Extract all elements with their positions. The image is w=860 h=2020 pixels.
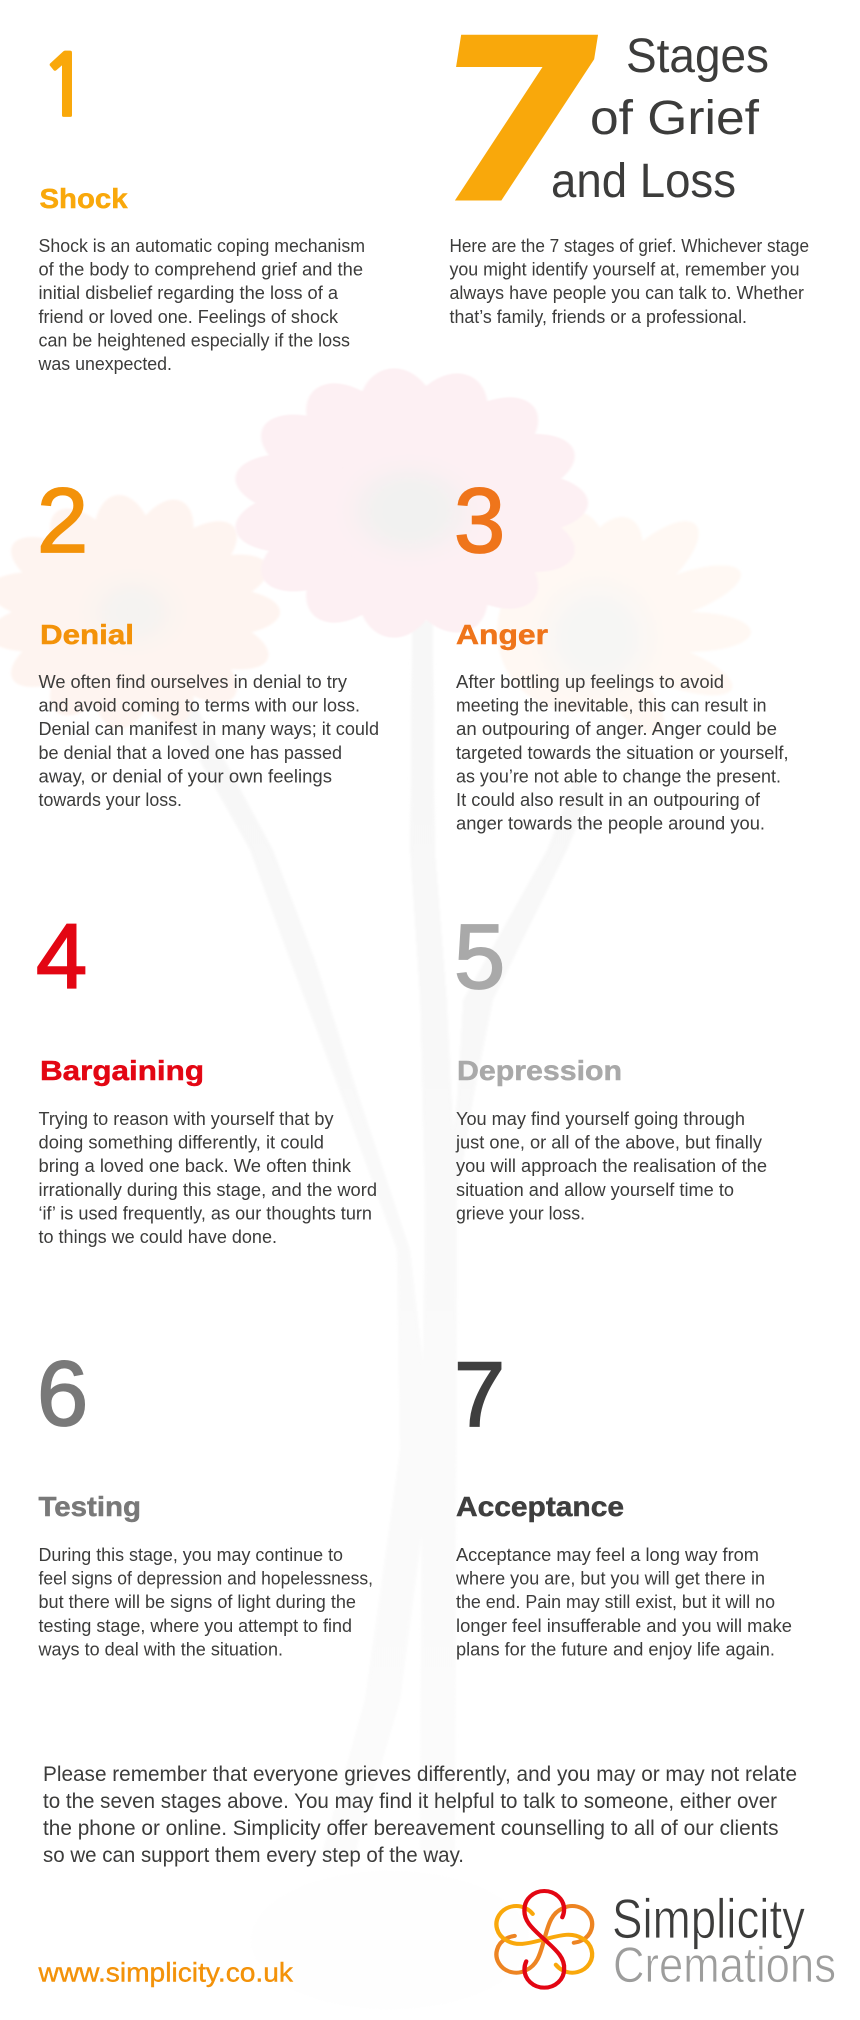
heading: Bargaining bbox=[40, 1055, 204, 1086]
body: targeted towards the situation or yourself, bbox=[456, 742, 788, 763]
closing paragraph: to the seven stages above. You may find it helpful to talk to someone, either over bbox=[43, 1790, 777, 1813]
heading: Anger bbox=[456, 619, 548, 650]
body: just one, or all of the above, but finally bbox=[455, 1132, 763, 1153]
stage 6: testing bbox=[37, 1343, 373, 1659]
body: irrationally during this stage, and the word bbox=[38, 1179, 377, 1200]
body: where you are, but you will get there in bbox=[455, 1568, 765, 1589]
number 2: 2 bbox=[37, 470, 88, 572]
body: Trying to reason with yourself that by bbox=[38, 1108, 334, 1129]
logo word: Simplicity: Simplicity bbox=[612, 1887, 805, 1950]
intro text: Here are the 7 stages of grief. Whichever stage bbox=[450, 235, 809, 256]
stage 5: depression bbox=[454, 906, 767, 1223]
body: plans for the future and enjoy life again. bbox=[456, 1638, 775, 1659]
logo mark bbox=[489, 1891, 599, 1988]
body: Denial can manifest in many ways; it could bbox=[38, 718, 379, 739]
body bbox=[38, 671, 379, 810]
body bbox=[456, 671, 788, 834]
stage 3: anger bbox=[454, 470, 788, 834]
heading: Testing bbox=[38, 1491, 141, 1522]
stems and vase bbox=[160, 620, 592, 2010]
website url: www.simplicity.co.uk bbox=[37, 1958, 294, 1988]
body: meeting the inevitable, this can result in bbox=[456, 695, 766, 716]
stage 2: denial bbox=[37, 470, 379, 810]
body: doing something differently, it could bbox=[38, 1132, 324, 1153]
body: feel signs of depression and hopelessness, bbox=[38, 1568, 373, 1589]
body: and avoid coming to terms with our loss. bbox=[38, 695, 360, 716]
body: You may find yourself going through bbox=[456, 1108, 745, 1129]
body: friend or loved one. Feelings of shock bbox=[38, 306, 339, 327]
body: the end. Pain may still exist, but it will no bbox=[456, 1591, 775, 1612]
body: to things we could have done. bbox=[38, 1226, 277, 1247]
title line: Stages: Stages bbox=[626, 30, 769, 83]
body bbox=[38, 1108, 377, 1247]
closing paragraph: the phone or online. Simplicity offer bereavement counselling to all of our clients bbox=[43, 1817, 778, 1840]
stage 4: bargaining bbox=[36, 906, 377, 1247]
title line: and Loss: and Loss bbox=[551, 155, 736, 208]
body: can be heightened especially if the loss bbox=[38, 329, 350, 350]
body: initial disbelief regarding the loss of a bbox=[38, 282, 339, 303]
intro text: that’s family, friends or a professional. bbox=[450, 306, 747, 327]
closing paragraph bbox=[43, 1763, 797, 1867]
body: towards your loss. bbox=[38, 789, 182, 810]
number 1: 1 bbox=[39, 44, 91, 129]
body: was unexpected. bbox=[38, 353, 172, 374]
body: longer feel insufferable and you will make bbox=[456, 1615, 792, 1636]
body: Acceptance may feel a long way from bbox=[456, 1544, 759, 1565]
body: After bottling up feelings to avoid bbox=[456, 671, 724, 692]
stage 7: acceptance bbox=[454, 1344, 792, 1659]
body: be denial that a loved one has passed bbox=[38, 742, 342, 763]
body: ‘if’ is used frequently, as our thoughts turn bbox=[38, 1202, 372, 1223]
body: We often find ourselves in denial to try bbox=[38, 671, 348, 692]
heading: Acceptance bbox=[456, 1491, 624, 1522]
body: ways to deal with the situation. bbox=[38, 1638, 283, 1659]
closing paragraph: so we can support them every step of the way. bbox=[43, 1844, 464, 1867]
logo: Simplicity Cremations bbox=[489, 1887, 836, 1993]
body: bring a loved one back. We often think bbox=[38, 1155, 352, 1176]
title block bbox=[411, 0, 769, 254]
number 3: 3 bbox=[454, 470, 505, 572]
body: Shock is an automatic coping mechanism bbox=[38, 235, 365, 256]
closing paragraph: Please remember that everyone grieves differently, and you may or may not relate bbox=[43, 1763, 797, 1786]
number 4: 4 bbox=[36, 906, 87, 1008]
body: situation and allow yourself time to bbox=[456, 1179, 734, 1200]
heading: Depression bbox=[457, 1055, 622, 1086]
right yellow flower bbox=[480, 507, 751, 744]
body bbox=[455, 1544, 792, 1659]
body: During this stage, you may continue to bbox=[38, 1544, 343, 1565]
heading: Shock bbox=[40, 183, 128, 214]
intro text bbox=[450, 235, 809, 327]
body: testing stage, where you attempt to find bbox=[38, 1615, 352, 1636]
body bbox=[455, 1108, 767, 1223]
body: anger towards the people around you. bbox=[456, 813, 765, 834]
title line: of Grief: of Grief bbox=[590, 92, 760, 145]
intro text: always have people you can talk to. Whether bbox=[450, 282, 804, 303]
number 6: 6 bbox=[37, 1343, 88, 1445]
body: away, or denial of your own feelings bbox=[38, 765, 332, 786]
body: It could also result in an outpouring of bbox=[456, 789, 761, 810]
body bbox=[38, 235, 365, 374]
left orange flower bbox=[0, 493, 280, 731]
centre pink flower bbox=[228, 365, 589, 641]
body: as you’re not able to change the present. bbox=[456, 765, 781, 786]
background: faint flower photograph bbox=[0, 365, 751, 2010]
body bbox=[38, 1544, 373, 1659]
intro text: you might identify yourself at, remember you bbox=[450, 259, 800, 280]
body: of the body to comprehend grief and the bbox=[38, 259, 363, 280]
number 7: 7 bbox=[454, 1344, 505, 1446]
number 5: 5 bbox=[454, 906, 505, 1008]
stage 1: shock bbox=[38, 44, 365, 374]
body: but there will be signs of light during the bbox=[38, 1591, 356, 1612]
body: an outpouring of anger. Anger could be bbox=[456, 718, 777, 739]
heading: Denial bbox=[40, 619, 134, 650]
body: grieve your loss. bbox=[456, 1202, 585, 1223]
body: you will approach the realisation of the bbox=[456, 1155, 767, 1176]
